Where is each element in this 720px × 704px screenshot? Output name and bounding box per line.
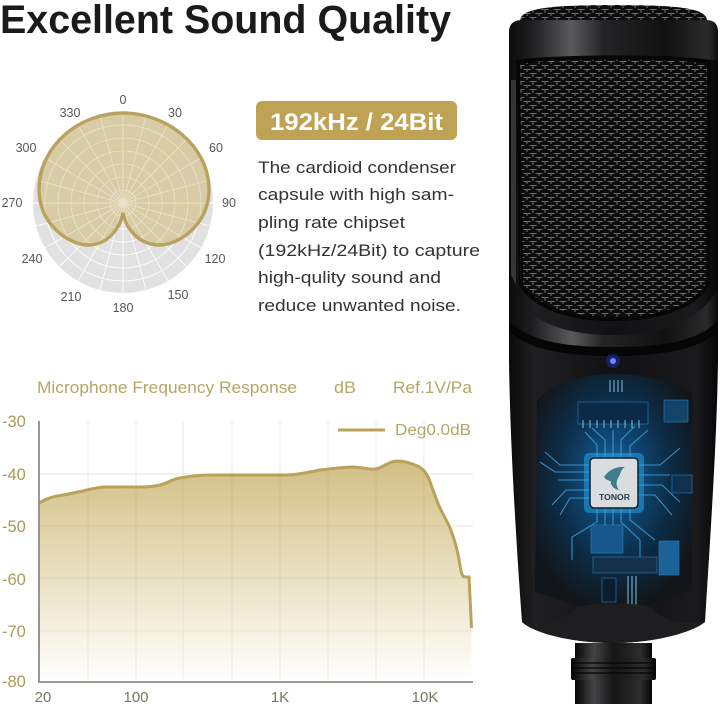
circuit traces bbox=[540, 426, 680, 565]
y axis labels: -70 bbox=[2, 623, 26, 641]
x axis labels bbox=[35, 689, 438, 704]
y axis labels: -40 bbox=[2, 466, 26, 484]
y axis labels: -50 bbox=[2, 518, 26, 536]
dolphin logo bbox=[604, 467, 625, 490]
tonor chip bbox=[584, 453, 644, 513]
polar angle labels: 120 bbox=[205, 252, 225, 266]
description text: high-qulity sound and bbox=[258, 268, 441, 287]
description text: pling rate chipset bbox=[258, 213, 405, 232]
y axis labels: -60 bbox=[2, 571, 26, 589]
polar angle labels: 300 bbox=[16, 141, 36, 155]
description text: The cardioid condenser bbox=[258, 158, 456, 177]
tonor chip: TONOR bbox=[599, 493, 630, 502]
connector bbox=[571, 643, 656, 704]
spec badge: 192kHz / 24Bit bbox=[270, 109, 443, 136]
frequency chart heading: dB bbox=[334, 379, 356, 397]
polar angle labels: 270 bbox=[2, 196, 22, 210]
top grille bbox=[520, 5, 707, 20]
polar angle labels: 90 bbox=[222, 196, 236, 210]
side reflection bbox=[511, 80, 516, 285]
description text: capsule with high sam- bbox=[258, 185, 454, 204]
description text: (192kHz/24Bit) to capture bbox=[258, 241, 480, 260]
mesh grille bbox=[518, 58, 709, 319]
circuit chips bbox=[578, 400, 692, 602]
polar angle labels: 30 bbox=[168, 106, 182, 120]
description text bbox=[258, 158, 480, 315]
frequency chart heading: Microphone Frequency Response bbox=[37, 379, 297, 397]
polar angle labels bbox=[2, 93, 236, 315]
microphone body bbox=[509, 60, 718, 643]
polar angle labels: 60 bbox=[209, 141, 223, 155]
circuit window bbox=[535, 374, 692, 606]
polar grid disc bbox=[33, 113, 213, 293]
polar angle labels: 0 bbox=[120, 93, 127, 107]
response area bbox=[39, 461, 472, 682]
polar pattern chart bbox=[2, 93, 236, 315]
collar shine bbox=[510, 290, 717, 348]
microphone bbox=[509, 5, 718, 704]
y axis labels bbox=[2, 413, 26, 691]
polar angle labels: 240 bbox=[22, 252, 42, 266]
chart legend bbox=[338, 422, 471, 439]
spec badge bbox=[256, 101, 457, 140]
polar angle labels: 330 bbox=[60, 106, 80, 120]
chart legend: Deg0.0dB bbox=[395, 422, 471, 439]
frequency response chart bbox=[2, 413, 473, 704]
y axis labels: -30 bbox=[2, 413, 26, 431]
frequency chart heading: Ref.1V/Pa bbox=[393, 379, 473, 397]
indicator light bbox=[606, 354, 620, 368]
polar angle labels: 210 bbox=[61, 290, 81, 304]
frequency chart heading bbox=[37, 379, 473, 397]
response curve bbox=[39, 461, 472, 628]
polar angle labels: 150 bbox=[168, 288, 188, 302]
y axis labels: -80 bbox=[2, 673, 26, 691]
microphone cap band bbox=[509, 20, 718, 90]
cardioid response curve bbox=[37, 111, 211, 247]
chart axes bbox=[39, 421, 473, 682]
description text: reduce unwanted noise. bbox=[258, 296, 461, 315]
base shadow bbox=[522, 604, 705, 643]
polar angle labels: 180 bbox=[113, 301, 133, 315]
chart grid bbox=[39, 421, 473, 682]
